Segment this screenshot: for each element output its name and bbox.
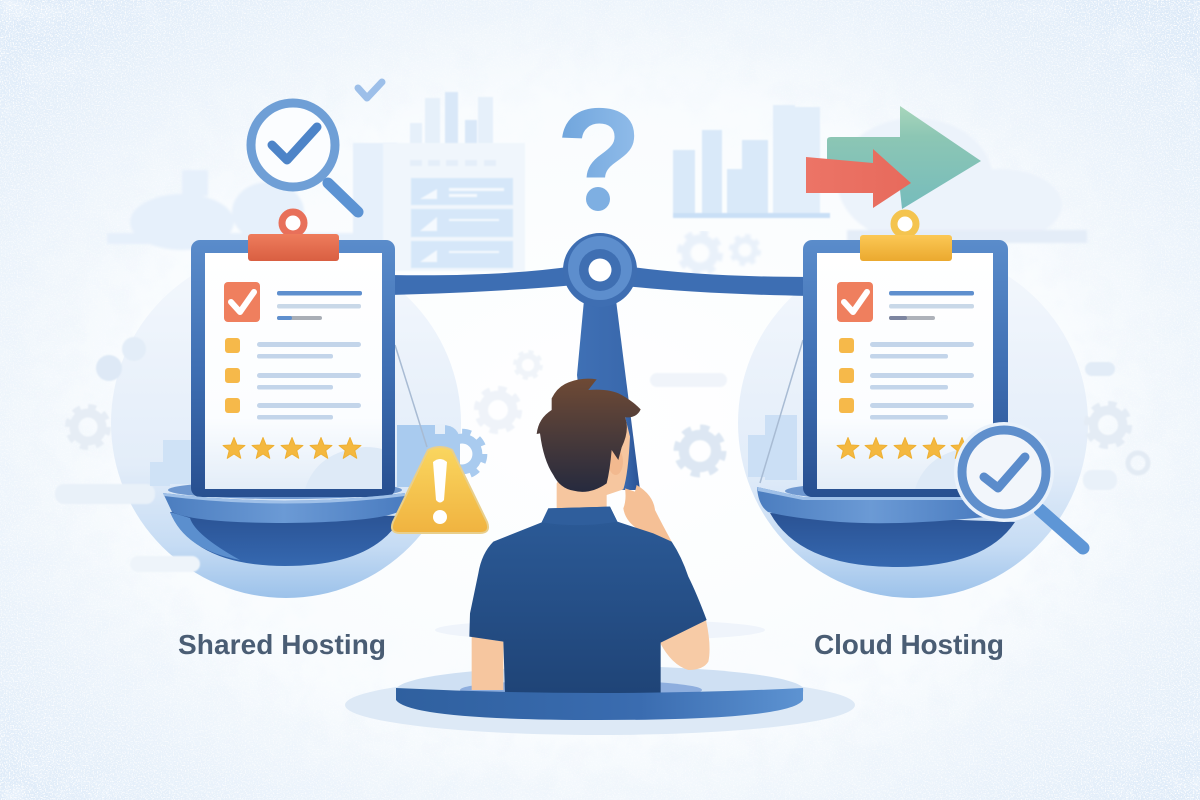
platform back bbox=[345, 619, 855, 735]
background cloud: left bbox=[107, 170, 377, 250]
left stars bbox=[223, 438, 361, 458]
platform band bbox=[396, 688, 803, 720]
right bowl bbox=[757, 487, 1015, 567]
background gears bbox=[68, 337, 1148, 474]
left checkbox bbox=[224, 282, 260, 322]
magnifier: bottom right bbox=[954, 422, 1083, 548]
background city inside left circle bbox=[150, 440, 193, 486]
background gears: top bbox=[680, 233, 759, 273]
right stars bbox=[837, 438, 973, 458]
warning icon bbox=[392, 447, 488, 533]
right bullets bbox=[839, 338, 854, 413]
server and gear behind warning bbox=[397, 424, 484, 487]
right pan circle bbox=[738, 248, 1088, 598]
small check mark bbox=[358, 82, 382, 98]
right header lines bbox=[889, 291, 974, 320]
right body lines bbox=[870, 342, 974, 420]
scale pivot bbox=[563, 233, 637, 307]
left pan circle bbox=[111, 248, 461, 598]
person hand bbox=[623, 485, 672, 542]
right chain bbox=[760, 340, 803, 483]
left bowl bbox=[163, 493, 405, 566]
arrows bbox=[806, 106, 981, 209]
person left arm bbox=[472, 637, 503, 690]
background city: towers bbox=[353, 92, 493, 243]
magnifier: top left bbox=[251, 103, 358, 212]
background city inside right circle bbox=[748, 415, 797, 480]
scale pillar bbox=[577, 300, 640, 490]
question mark: ? bbox=[556, 79, 642, 238]
red arrow bbox=[806, 149, 911, 208]
person bbox=[469, 379, 710, 693]
person right arm bbox=[660, 620, 710, 670]
background cloud: right bbox=[837, 118, 1087, 243]
person neck and face bbox=[557, 417, 630, 508]
right clip bbox=[860, 213, 952, 261]
left header lines bbox=[277, 291, 362, 320]
person shirt bbox=[469, 507, 707, 693]
scale beam bbox=[390, 266, 810, 296]
background strips bbox=[55, 362, 1117, 572]
left clip bbox=[248, 212, 339, 261]
background panel: server rack bbox=[383, 143, 525, 271]
right checkbox bbox=[837, 282, 873, 322]
person collar bbox=[542, 507, 617, 525]
green arrow bbox=[827, 106, 981, 209]
person ear bbox=[608, 448, 623, 475]
label: shared hosting: Shared Hosting bbox=[178, 629, 386, 660]
right bowl back bbox=[785, 482, 1005, 500]
label: cloud hosting: Cloud Hosting bbox=[814, 629, 1004, 660]
left chain bbox=[395, 345, 427, 447]
left bowl back bbox=[168, 481, 402, 499]
background bar chart bbox=[673, 105, 830, 218]
question mark bbox=[562, 108, 634, 211]
left bullets bbox=[225, 338, 240, 413]
person hair bbox=[537, 379, 641, 492]
right clipboard bbox=[803, 213, 1008, 497]
left clipboard bbox=[191, 212, 395, 497]
left body lines bbox=[257, 342, 361, 420]
